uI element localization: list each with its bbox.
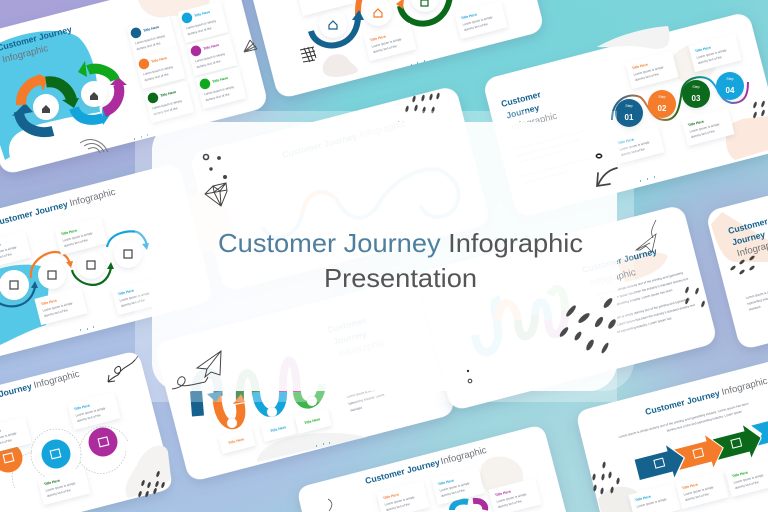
info box orange: Lorem Ipsum is simply bbox=[143, 65, 174, 76]
info box blue: dummy text of the bbox=[120, 298, 146, 308]
info box green bbox=[725, 459, 768, 497]
leaf marks bbox=[592, 461, 620, 495]
ring segments bbox=[311, 0, 450, 45]
info box orange: Lorem Ipsum is simply bbox=[633, 65, 664, 77]
card title bbox=[644, 376, 768, 418]
info box purple: Title Here bbox=[203, 43, 220, 51]
card title: Infographic bbox=[32, 369, 81, 391]
info box orange bbox=[625, 51, 679, 89]
main subtitle: Presentation bbox=[324, 263, 477, 293]
card title: Infographic bbox=[440, 445, 488, 467]
slide card: bottom centre bbox=[299, 427, 566, 512]
card title: Customer bbox=[727, 216, 768, 236]
info box green: Lorem Ipsum is simply bbox=[45, 481, 76, 493]
diamond with dots doodle bbox=[204, 154, 227, 206]
info box orange: Lorem Ipsum is simply bbox=[384, 495, 415, 507]
info box orange: Title Here bbox=[382, 492, 399, 500]
info box blue: dummy text of the bbox=[187, 26, 212, 36]
info box green: Lorem Ipsum is simply bbox=[62, 231, 93, 243]
pager dots bbox=[134, 135, 148, 139]
info box blue: dummy text of the bbox=[463, 22, 489, 32]
connecting arcs bbox=[0, 231, 149, 306]
peach blob bbox=[169, 193, 233, 251]
info box orange bbox=[675, 471, 729, 509]
blue blob background bbox=[0, 31, 100, 160]
curly arrow doodle bbox=[108, 356, 138, 382]
info box orange: Title Here bbox=[369, 34, 386, 42]
info box blue: Title Here bbox=[694, 45, 711, 53]
card title bbox=[581, 246, 662, 290]
body text: typesetting industry. Lorem bbox=[348, 393, 385, 406]
peach wedge bbox=[711, 212, 768, 262]
cream blob bbox=[481, 456, 523, 502]
info box orange: Lorem Ipsum is simply bbox=[42, 301, 73, 313]
info box navy: Title Here bbox=[143, 25, 160, 33]
info box green bbox=[54, 217, 108, 255]
info box navy: Title Here bbox=[634, 494, 651, 502]
big leaf marks doodle bbox=[558, 297, 617, 354]
card title: Customer Journey bbox=[644, 388, 721, 417]
grey blob bbox=[598, 487, 643, 512]
card title: Customer Journey bbox=[581, 246, 658, 275]
leaf marks bbox=[753, 100, 765, 119]
body text: Lorem Ipsum is simply dummy text of the printing and typesetting bbox=[603, 297, 691, 323]
arrow orange bbox=[671, 430, 728, 477]
card title: Customer Journey bbox=[364, 457, 441, 486]
info box orange: dummy text of the bbox=[43, 308, 69, 318]
info box orange: dummy text of the bbox=[372, 44, 398, 54]
card title: Journey bbox=[731, 229, 766, 247]
body text: standard bbox=[350, 406, 363, 413]
arrow blue bbox=[748, 406, 768, 453]
cream blob bbox=[671, 44, 717, 83]
circle icons bbox=[3, 437, 109, 463]
title box blue bbox=[260, 416, 298, 442]
info box blue: Title Here bbox=[117, 288, 134, 296]
hash doodle bbox=[300, 47, 316, 62]
step 02: 02 bbox=[658, 104, 667, 113]
info box purple bbox=[187, 34, 237, 76]
info box green: dummy text of the bbox=[690, 129, 716, 139]
info box left bbox=[0, 231, 32, 269]
blue blob bbox=[0, 265, 49, 345]
info box blue bbox=[67, 392, 121, 430]
body text: typesetting industry. Lorem Ipsum bbox=[523, 169, 569, 185]
info box purple: Title Here bbox=[494, 489, 511, 497]
ring highlight bbox=[302, 192, 337, 215]
slide card: wave paragraph bbox=[416, 204, 718, 411]
body text bbox=[514, 129, 595, 185]
peach blob bbox=[138, 0, 210, 17]
info box green: Lorem Ipsum is simply bbox=[689, 122, 720, 134]
info box blue: Lorem Ipsum is simply bbox=[186, 19, 217, 30]
coloured arcs bbox=[452, 501, 485, 510]
info box blue: dummy text of the bbox=[440, 488, 466, 498]
fan doodle bbox=[244, 40, 257, 52]
info box blue bbox=[688, 34, 742, 72]
info box green: Lorem Ipsum is simply bbox=[204, 85, 235, 96]
grey blob bbox=[257, 433, 367, 462]
info box blue: Lorem Ipsum is simply bbox=[119, 291, 150, 303]
slide card: s-curve steps bbox=[0, 162, 214, 369]
info box blue: dummy text of the bbox=[76, 413, 102, 423]
info box navy bbox=[127, 16, 177, 58]
body text: standard dummy text ever since the bbox=[518, 148, 566, 165]
info box green: dummy text of the bbox=[63, 238, 89, 248]
card title: Infographic bbox=[589, 267, 637, 289]
info box orange: Title Here bbox=[631, 62, 648, 70]
info box blue lower bbox=[611, 126, 665, 164]
infinity arrow cycle bbox=[12, 61, 127, 132]
intro text: Lorem Ipsum is simply dummy text of the printing and typesetting industry. Lorem Ipsum has been bbox=[618, 402, 749, 439]
arrow green bbox=[709, 420, 766, 467]
leaf marks bbox=[138, 471, 165, 497]
leaf marks bbox=[730, 255, 755, 275]
info box blue: Title Here bbox=[194, 10, 211, 18]
title ghost: Infographic bbox=[358, 118, 407, 141]
info box navy: Lorem Ipsum is simply bbox=[135, 34, 166, 45]
info box orange: dummy text of the bbox=[385, 502, 411, 512]
info box blue: Lorem Ipsum is simply bbox=[696, 48, 727, 60]
info box orange bbox=[135, 47, 185, 89]
body text bbox=[596, 270, 697, 337]
peach blob bbox=[725, 116, 768, 160]
dashed rings bbox=[12, 426, 128, 488]
info box orange: Title Here bbox=[40, 298, 57, 306]
slide card: right edge bbox=[705, 143, 768, 350]
info box blue: Title Here bbox=[460, 12, 477, 20]
info box blue: dummy text of the bbox=[697, 55, 723, 65]
info box purple: dummy text of the bbox=[196, 59, 221, 69]
step 03: 03 bbox=[692, 94, 701, 103]
title box green bbox=[294, 408, 332, 434]
slide card: ring path bbox=[243, 0, 545, 99]
info box green: Title Here bbox=[731, 470, 748, 478]
slide card: arrows row bbox=[578, 362, 768, 512]
info box purple: Lorem Ipsum is simply bbox=[496, 492, 527, 504]
info box navy: dummy text of the bbox=[136, 41, 161, 51]
card title bbox=[500, 86, 559, 134]
info box purple: dummy text of the bbox=[497, 499, 523, 509]
top rain marks doodle bbox=[405, 92, 440, 114]
info box orange: dummy text of the bbox=[684, 492, 710, 502]
info box green: Title Here bbox=[60, 228, 77, 236]
body text bbox=[346, 386, 387, 413]
title ghost: Customer Journey bbox=[281, 131, 358, 160]
overlay panel bbox=[135, 111, 634, 402]
grey blob bbox=[323, 54, 358, 77]
info box orange bbox=[376, 481, 430, 512]
info box green bbox=[681, 108, 735, 146]
info box orange: Title Here bbox=[151, 56, 168, 64]
doodle bbox=[328, 499, 332, 511]
step 03: Step bbox=[692, 85, 700, 89]
step 04: Step bbox=[726, 77, 734, 81]
step 01: Step bbox=[625, 104, 633, 108]
node icons bbox=[227, 396, 317, 428]
circle blue bbox=[42, 440, 70, 468]
info box green: dummy text of the bbox=[734, 480, 760, 490]
card title ghost: Customer bbox=[326, 315, 368, 335]
card title bbox=[0, 24, 76, 66]
info box green: dummy text of the bbox=[205, 92, 230, 102]
card title: Infographic bbox=[68, 187, 117, 209]
pager dots bbox=[316, 443, 330, 446]
card title: Infographic bbox=[1, 43, 50, 66]
body text: Lorem Ipsum is simply dummy text of the printing and typesetting bbox=[596, 271, 684, 297]
info box dark green: Lorem Ipsum is simply bbox=[152, 99, 183, 110]
info box blue: Title Here bbox=[437, 478, 454, 486]
arrow navy bbox=[632, 440, 689, 487]
step 04: 04 bbox=[726, 86, 735, 95]
info box orange: Lorem Ipsum is simply bbox=[371, 37, 402, 49]
u-turn arrow path bbox=[196, 360, 322, 425]
card title: Infographic bbox=[720, 376, 768, 398]
curved lines doodle bbox=[80, 140, 108, 153]
body text: Lorem Ipsum is simply dummy text of the printing and bbox=[521, 156, 593, 178]
intro text: dummy text of the and typesetting industry. Lorem Ipsum bbox=[666, 409, 743, 433]
step 01: 01 bbox=[625, 113, 634, 122]
title ghost bbox=[281, 118, 407, 161]
info box purple bbox=[488, 478, 542, 512]
info box top bbox=[296, 0, 353, 16]
body text: standard bbox=[748, 305, 761, 312]
info box blue bbox=[178, 1, 228, 43]
grey blob bbox=[597, 26, 670, 49]
info box dark green bbox=[144, 81, 194, 123]
step 01 bbox=[615, 99, 643, 127]
card title ghost: Infographic bbox=[337, 337, 386, 360]
info box dark green: Title Here bbox=[160, 90, 177, 98]
step 02: Step bbox=[658, 95, 666, 99]
main title: Customer Journey Infographic bbox=[218, 228, 583, 258]
pager dots bbox=[80, 327, 94, 330]
circle purple bbox=[88, 428, 118, 456]
info box blue bbox=[454, 1, 508, 39]
wave ghost bbox=[475, 289, 565, 352]
card title bbox=[727, 214, 768, 260]
info box navy: Lorem Ipsum is simply bbox=[636, 497, 667, 509]
slide card: circular arrows bbox=[0, 0, 269, 175]
step 04 bbox=[716, 72, 744, 100]
title box orange bbox=[218, 428, 256, 454]
info box left bbox=[0, 417, 32, 455]
info box green bbox=[196, 67, 246, 109]
title box green: Title Here bbox=[304, 417, 321, 425]
slide card: u-turn arrows bbox=[154, 275, 456, 482]
card title: Journey bbox=[505, 102, 540, 121]
card title ghost: Journey bbox=[332, 329, 368, 347]
info box orange: Lorem Ipsum is simply bbox=[683, 485, 714, 497]
info box green: Title Here bbox=[687, 119, 704, 127]
card title bbox=[364, 445, 488, 487]
info box blue bbox=[111, 277, 165, 315]
info box orange: Title Here bbox=[681, 482, 698, 490]
body text: of the and typesetting industry. Lorem Ipsum has bbox=[607, 316, 672, 337]
body text: Lorem Ipsum is simply dummy text of the printing and bbox=[514, 129, 586, 151]
leaf marks bbox=[685, 286, 705, 308]
info box green bbox=[37, 467, 91, 505]
body text bbox=[745, 288, 768, 312]
ring ghost bbox=[263, 169, 459, 238]
card title bbox=[0, 369, 81, 411]
body text: typesetting industry. Lorem Ipsum has been the bbox=[516, 138, 580, 158]
wave line bbox=[612, 77, 748, 120]
card title: Customer bbox=[500, 89, 542, 109]
arrow heads bbox=[207, 391, 245, 404]
title box orange: Title Here bbox=[228, 437, 245, 445]
peach blob bbox=[617, 253, 668, 282]
info box orange bbox=[34, 287, 88, 325]
sketched arrow bbox=[597, 168, 617, 186]
info box orange: dummy text of the bbox=[634, 72, 660, 82]
grey blob bbox=[126, 446, 171, 498]
info box purple: Lorem Ipsum is simply bbox=[195, 52, 226, 63]
card title ghost bbox=[326, 312, 386, 361]
info box dark green: dummy text of the bbox=[153, 106, 178, 116]
pager dots bbox=[640, 177, 655, 181]
info box blue lower: dummy text of the bbox=[620, 147, 646, 157]
info box blue: Lorem Ipsum is simply bbox=[439, 481, 470, 493]
card title bbox=[0, 187, 117, 229]
title box blue: Title Here bbox=[270, 425, 287, 433]
paper plane doodle bbox=[636, 220, 656, 252]
ink oval doodle bbox=[596, 154, 602, 158]
slide card: numbered steps bbox=[482, 11, 768, 218]
info box blue bbox=[431, 467, 485, 505]
info box green: Title Here bbox=[43, 478, 60, 486]
info box green: Title Here bbox=[212, 76, 229, 84]
card title: Infographic bbox=[510, 111, 559, 133]
step 02 bbox=[648, 90, 676, 118]
info box green: dummy text of the bbox=[46, 488, 72, 498]
body text: Lorem Ipsum is simply... bbox=[346, 387, 379, 399]
circle orange bbox=[0, 444, 22, 472]
paper plane doodle bbox=[172, 351, 221, 389]
info box blue lower: Title Here bbox=[617, 137, 634, 145]
slide card: centre rings (behind overlay) bbox=[169, 85, 491, 292]
info box orange: dummy text of the bbox=[144, 72, 169, 82]
slide card: three circles bbox=[0, 353, 171, 512]
info box navy bbox=[628, 483, 682, 512]
info box blue: Lorem Ipsum is simply bbox=[75, 406, 106, 418]
pager dots bbox=[411, 61, 425, 65]
small dots doodle bbox=[467, 370, 472, 383]
body text: of the and typesetting industry. Lorem Ipsum has been bbox=[600, 288, 673, 311]
info box blue: Lorem Ipsum is simply bbox=[462, 15, 493, 27]
info box green: Lorem Ipsum is simply bbox=[733, 473, 764, 485]
info box blue: Title Here bbox=[73, 403, 90, 411]
info box blue lower: Lorem Ipsum is simply bbox=[619, 140, 650, 152]
body text: industry. Lorem Ipsum has been the industry's standard dummy text bbox=[605, 303, 696, 330]
step 03 bbox=[682, 80, 710, 108]
body text: industry. Lorem Ipsum has been the industry's standard dummy text bbox=[598, 277, 689, 304]
info box orange bbox=[363, 23, 417, 61]
